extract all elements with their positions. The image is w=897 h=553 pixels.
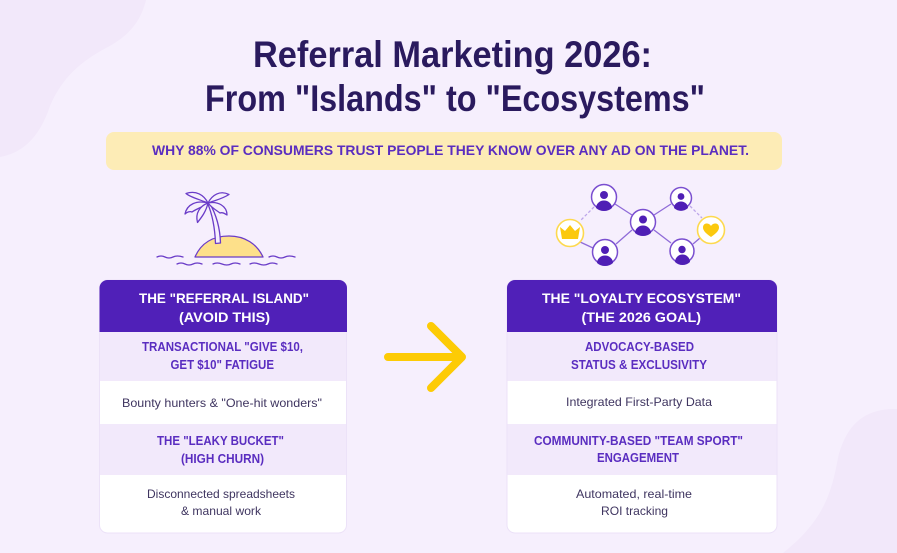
row: transactional fatigue: TRANSACTIONAL "GIVE $10, xyxy=(142,340,303,354)
row: leaky bucket: THE "LEAKY BUCKET" xyxy=(157,434,284,448)
arrow xyxy=(388,326,462,388)
subtitle banner xyxy=(106,132,782,170)
row: ROI tracking: ROI tracking xyxy=(601,504,668,518)
row: team sport: ENGAGEMENT xyxy=(597,451,679,465)
icon: palm island xyxy=(157,192,295,265)
subtitle banner: WHY 88% OF CONSUMERS TRUST PEOPLE THEY KNOW OVER ANY AD ON THE PLANET. xyxy=(152,142,749,158)
title: From "Islands" to "Ecosystems" xyxy=(205,78,705,119)
row: team sport xyxy=(508,424,776,475)
panel header: loyalty ecosystem xyxy=(507,280,777,332)
row: first-party data: Integrated First-Party Data xyxy=(566,395,712,409)
row: transactional fatigue xyxy=(100,332,346,381)
row: team sport: COMMUNITY-BASED "TEAM SPORT" xyxy=(534,434,743,448)
panel header: loyalty ecosystem: THE "LOYALTY ECOSYSTEM" xyxy=(542,290,741,306)
panel header: referral island: (AVOID THIS) xyxy=(179,309,270,325)
row: leaky bucket xyxy=(100,424,346,475)
panel header: loyalty ecosystem: (THE 2026 GOAL) xyxy=(582,309,701,325)
title xyxy=(205,34,705,119)
row: bounty hunters: Bounty hunters & "One-hit wonders" xyxy=(122,396,322,410)
row: leaky bucket: (HIGH CHURN) xyxy=(181,452,264,466)
panel: loyalty ecosystem xyxy=(507,280,777,533)
row: advocacy status xyxy=(508,332,776,381)
panel header: referral island xyxy=(100,280,347,332)
row: disconnected spreadsheets: Disconnected spreadsheets xyxy=(147,487,295,501)
row: disconnected spreadsheets: & manual work xyxy=(181,504,262,518)
panel: referral island xyxy=(100,280,347,533)
icon: community network xyxy=(556,184,724,266)
title: Referral Marketing 2026: xyxy=(253,34,652,75)
row: transactional fatigue: GET $10" FATIGUE xyxy=(170,358,274,372)
row: advocacy status: ADVOCACY-BASED xyxy=(585,340,694,354)
row: ROI tracking xyxy=(576,487,692,518)
row: disconnected spreadsheets xyxy=(147,487,295,518)
panel header: referral island: THE "REFERRAL ISLAND" xyxy=(139,290,309,306)
row: ROI tracking: Automated, real-time xyxy=(576,487,692,501)
row: advocacy status: STATUS & EXCLUSIVITY xyxy=(571,358,708,372)
